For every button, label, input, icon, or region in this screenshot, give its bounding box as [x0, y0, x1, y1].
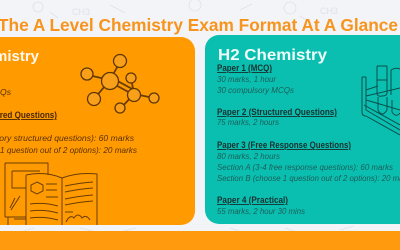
text: CH3	[72, 7, 90, 17]
text: Paper 2	[217, 107, 337, 127]
text: CH3	[320, 6, 338, 16]
text: Paper 3: Section A (3-4 free response questions): 60 marks	[217, 162, 393, 172]
icon: test tubes	[362, 66, 400, 135]
text: Paper 1: 30 marks, 1 hour	[217, 74, 277, 84]
text: Paper 4: Paper 4 (Practical)	[217, 195, 288, 205]
panel: H1 Chemistry	[0, 37, 195, 225]
text: Paper 3: Paper 3 (Free Response Questions)	[217, 140, 351, 150]
heading: H2 Chemistry: H2 Chemistry	[218, 47, 327, 64]
text: Paper 3: 80 marks, 2 hours	[217, 151, 280, 161]
panel: H2 Chemistry	[205, 35, 400, 224]
footer band	[0, 231, 400, 250]
text: Paper 1: 30 compulsory MCQs	[217, 85, 294, 95]
icon: books	[5, 163, 97, 225]
text: Paper 1	[217, 63, 294, 95]
text: Paper 2: 75 marks, 2 hours	[217, 117, 279, 127]
title: The A Level Chemistry Exam Format At A Glance	[0, 15, 398, 35]
text: Paper 4: 55 marks, 2 hour 30 mins	[217, 206, 305, 216]
text: Paper 1: Paper 1 (MCQ)	[217, 63, 272, 73]
icon: molecule	[81, 54, 159, 113]
text: Paper 4	[217, 195, 305, 216]
text: Paper 2: Paper 2 (Structured Questions)	[217, 107, 337, 117]
text: Paper 3	[217, 140, 400, 183]
